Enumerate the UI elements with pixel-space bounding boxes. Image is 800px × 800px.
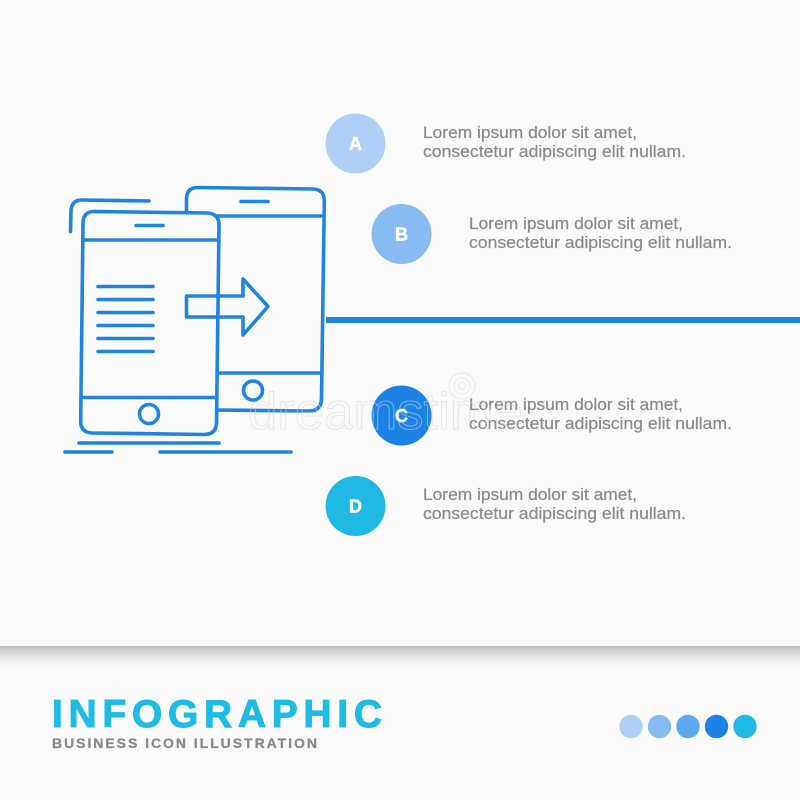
- text D: Lorem ipsum dolor sit amet,: [423, 486, 637, 504]
- badge C: C: [395, 406, 408, 426]
- text C: Lorem ipsum dolor sit amet,: [469, 396, 683, 414]
- text A: consectetur adipiscing elit nullam.: [423, 143, 686, 161]
- decorative corner line: [70, 200, 149, 232]
- horizontal connector line: [326, 317, 800, 323]
- watermark: dreamstime: [248, 383, 523, 441]
- palette dots: [619, 715, 757, 738]
- badge C: [372, 386, 432, 446]
- item C: [372, 386, 732, 446]
- text A: Lorem ipsum dolor sit amet,: [423, 124, 637, 142]
- text C: consectetur adipiscing elit nullam.: [469, 415, 732, 433]
- text B: consectetur adipiscing elit nullam.: [469, 234, 732, 252]
- ground lines: [65, 443, 291, 452]
- front phone: [81, 212, 219, 434]
- badge A: [326, 114, 386, 174]
- back phone: [186, 188, 324, 411]
- item A: [326, 114, 686, 174]
- badge B: [372, 204, 432, 264]
- item B: [372, 204, 732, 264]
- badge A: A: [349, 134, 362, 154]
- badge D: D: [349, 496, 362, 516]
- icon: phones data transfer: [65, 188, 324, 452]
- badge D: [326, 476, 386, 536]
- text D: consectetur adipiscing elit nullam.: [423, 505, 686, 523]
- item D: [326, 476, 686, 536]
- text lines on front phone: [98, 286, 153, 352]
- arrow: [186, 279, 268, 335]
- text B: Lorem ipsum dolor sit amet,: [469, 215, 683, 233]
- title: INFOGRAPHIC: [52, 693, 382, 736]
- subtitle: BUSINESS ICON ILLUSTRATION: [52, 735, 317, 751]
- footer shadow band: [0, 646, 800, 666]
- badge B: B: [395, 224, 408, 244]
